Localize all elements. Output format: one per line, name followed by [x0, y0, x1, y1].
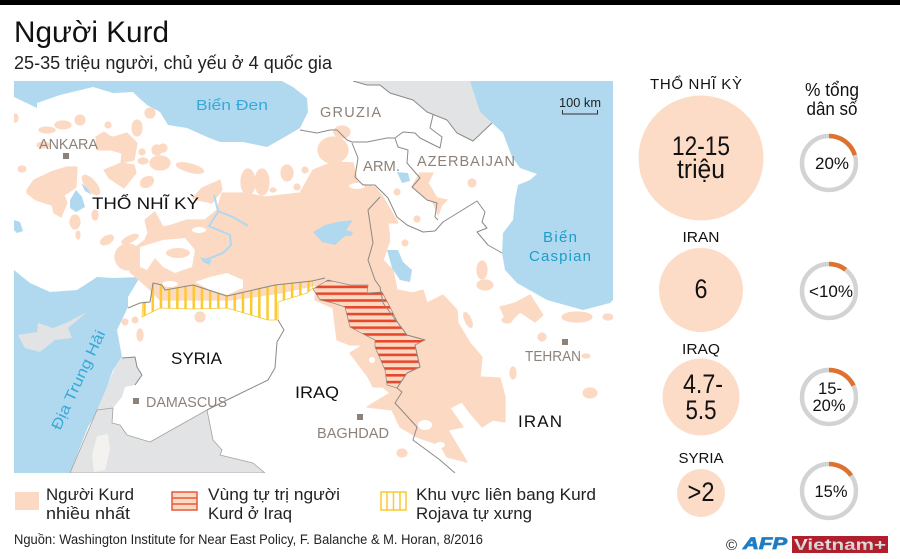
label: Tehran: TEHRAN	[525, 349, 581, 365]
title: Người Kurd	[14, 16, 169, 49]
ring: Iraq 15-20%: 20%	[812, 396, 846, 415]
heading: percent of population	[805, 80, 859, 119]
legend: Iraqi Kurdistan: Vùng tự trị người	[208, 485, 340, 504]
Syria population: >2	[688, 477, 714, 507]
Caspian Sea	[470, 81, 613, 310]
legend: Rojava	[381, 485, 596, 523]
label: Iraq: IRAQ	[295, 383, 339, 402]
Iran population	[659, 230, 743, 332]
neighbouring countries in grey	[18, 81, 492, 473]
Iran population: IRAN	[682, 230, 720, 246]
Iraq population	[662, 342, 740, 436]
ring: Syria 15%: 15%	[814, 482, 848, 501]
Iraq population: 4.7-	[683, 369, 723, 399]
Mediterranean Sea	[14, 270, 140, 473]
legend: Rojava: Khu vực liên bang Kurd	[416, 485, 596, 504]
Syria population	[677, 451, 725, 517]
label: Ankara: ANKARA	[39, 137, 98, 153]
icon: Tehran city	[562, 339, 568, 345]
subtitle: 25-35 triệu người, chủ yếu ở 4 quốc gia	[14, 52, 333, 73]
heading: percent of population: dân số	[806, 99, 858, 119]
scale bar: 100 km	[559, 96, 601, 110]
label: Azerbaijan: AZERBAIJAN	[417, 154, 515, 170]
ring: Iran <10%	[802, 264, 856, 318]
legend: Kurd population: nhiều nhất	[46, 504, 130, 523]
heading: percent of population: % tổng	[805, 80, 859, 100]
Iran population: 6	[694, 274, 708, 304]
legend: Iraqi Kurdistan	[172, 485, 340, 523]
label: Damascus: DAMASCUS	[146, 395, 227, 411]
legend: Kurd population: Người Kurd	[46, 485, 134, 504]
ring: Iran <10%: <10%	[809, 282, 853, 301]
islet inside gap	[166, 248, 190, 258]
Iraq population: 5.5	[686, 395, 716, 425]
Turkey population: 12-15	[672, 131, 730, 161]
label: Biển Đen: Biển Đen	[196, 97, 268, 114]
ring: Turkey 20%	[802, 136, 856, 190]
ring: Syria 15%	[802, 464, 856, 518]
ring: Iraq 15-20%	[802, 370, 856, 424]
legend	[15, 485, 596, 523]
lakes	[14, 172, 412, 282]
Kurdish population areas	[12, 108, 613, 462]
source: Nguồn: Washington Institute for Near East Policy, F. Balanche & M. Horan, 8/2016	[14, 532, 483, 547]
panel: percent rings	[802, 136, 856, 518]
borders	[122, 81, 502, 473]
label: Arm: ARM.	[363, 159, 400, 175]
icon: Damascus city	[133, 398, 139, 404]
label: Địa Trung Hải: Địa Trung Hải	[48, 328, 109, 433]
map labels	[39, 96, 601, 442]
ring: Iraq 15-20%: 15-	[818, 379, 842, 398]
Rojava federal area	[142, 281, 313, 320]
panel: population circles	[638, 75, 764, 517]
label: Baghdad: BAGHDAD	[317, 426, 389, 442]
Turkey population: THỔ NHĨ KỲ	[650, 75, 742, 93]
ring: Turkey 20%: 20%	[815, 154, 849, 173]
icon: Baghdad city	[357, 414, 363, 420]
label: Caspian: Caspian	[529, 248, 591, 265]
legend: Kurd population	[15, 485, 134, 523]
top bar	[0, 0, 900, 5]
Black Sea	[14, 81, 308, 147]
label: Thổ Nhĩ Kỳ: THỔ NHĨ KỲ	[92, 194, 199, 213]
logo: Vietnam+: Vietnam+	[794, 537, 886, 554]
credit: AFP: ©	[726, 537, 737, 554]
Syria population: SYRIA	[678, 451, 724, 467]
label: Gruzia: GRUZIA	[320, 105, 381, 121]
panel: map	[12, 81, 613, 473]
icon: Ankara city	[63, 153, 69, 159]
credit: AFP: AFP	[742, 534, 788, 553]
Iraqi Kurdistan region	[313, 280, 425, 388]
white gaps in populated areas	[140, 183, 445, 448]
Turkey population: triệu	[677, 154, 725, 184]
label: Syria: SYRIA	[171, 349, 223, 368]
legend: Rojava: Rojava tự xưng	[416, 504, 532, 523]
credit: AFP	[726, 534, 788, 554]
Turkey population	[638, 75, 764, 220]
label: Iran: IRAN	[518, 412, 562, 431]
legend: Iraqi Kurdistan: Kurd ở Iraq	[208, 504, 292, 523]
Iraq population: IRAQ	[682, 342, 720, 358]
label: Biển Caspian: Biển	[543, 229, 577, 246]
